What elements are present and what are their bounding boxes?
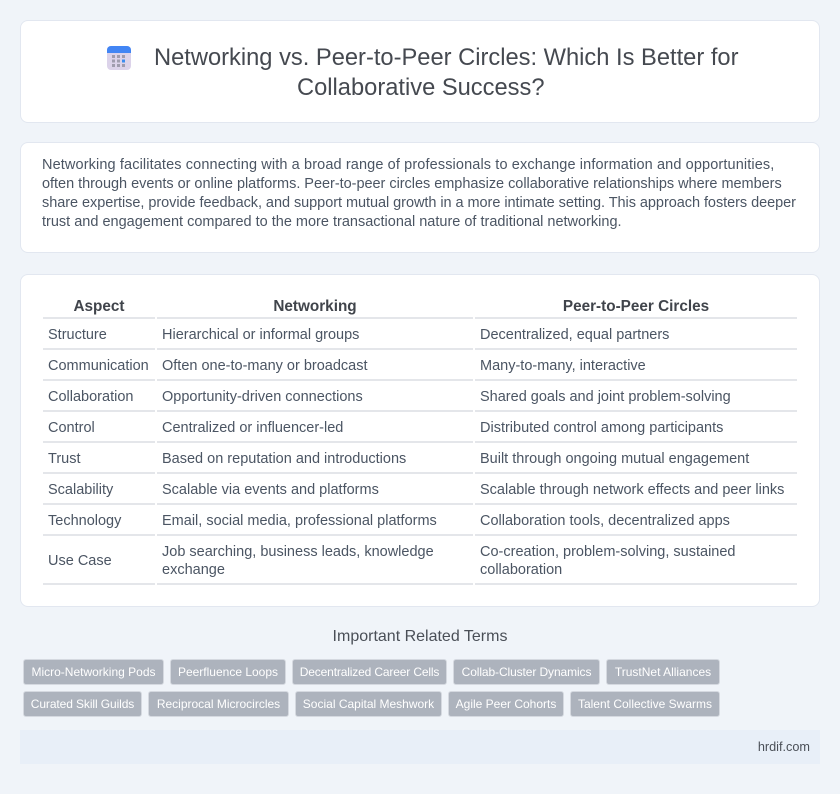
title: Collaborative Success? (297, 75, 545, 101)
footer (20, 730, 820, 764)
footer: source: hrdif.com (758, 740, 810, 754)
panel: comparison table: Hierarchical or informal groups (162, 327, 359, 343)
related terms tags: Curated Skill Guilds (31, 697, 134, 711)
panel: comparison table: Job searching, business leads, knowledge (162, 544, 434, 560)
panel: comparison table: Opportunity-driven connections (162, 389, 363, 405)
panel: comparison table: collaboration (480, 562, 562, 578)
related terms tags: Social Capital Meshwork (303, 697, 434, 711)
panel: comparison table: exchange (162, 562, 225, 578)
title: Networking vs. Peer-to-Peer Circles: Which Is Better for (154, 45, 738, 71)
panel: comparison table: Many-to-many, interactive (480, 358, 646, 374)
table header: Peer-to-Peer Circles: Peer-to-Peer Circles (563, 298, 709, 315)
related terms tags: Decentralized Career Cells (300, 665, 439, 679)
panel: comparison table: Built through ongoing mutual engagement (480, 451, 749, 467)
text block: description: Networking facilitates connecting with a broad range of professionals to exchange information and opportunities, (42, 157, 774, 173)
panel: comparison table: Shared goals and joint problem-solving (480, 389, 731, 405)
text block: description: often through events or online platforms. Peer-to-peer circles emphasize collaborative relationships where members (42, 176, 782, 192)
row: Technology: Technology (48, 513, 121, 529)
panel: comparison table: Scalable through network effects and peer links (480, 482, 784, 498)
related terms tags (23, 659, 720, 717)
panel: description (20, 142, 820, 253)
row: Collaboration: Collaboration (48, 389, 133, 405)
text block: description (42, 157, 796, 230)
row: Trust: Trust (48, 451, 80, 467)
table header: Aspect: Aspect (73, 298, 124, 315)
panel: comparison table: Scalable via events and platforms (162, 482, 379, 498)
row: Use Case: Use Case (48, 553, 112, 569)
icon: calendar (107, 46, 131, 70)
row: Scalability: Scalability (48, 482, 113, 498)
panel: comparison table: Based on reputation and introductions (162, 451, 406, 467)
panel: comparison table: Often one-to-many or broadcast (162, 358, 368, 374)
text block: description: share expertise, provide feedback, and support mutual growth in a more intimate setting. This approach fosters deeper (42, 195, 796, 211)
text block: description: trust and engagement compared to the more transactional nature of traditional networking. (42, 214, 622, 230)
panel: comparison table: Email, social media, professional platforms (162, 513, 437, 529)
related terms tags: Micro-Networking Pods (31, 665, 156, 679)
table header: Networking: Networking (273, 298, 357, 315)
panel: comparison table: Collaboration tools, decentralized apps (480, 513, 730, 529)
related terms tags: TrustNet Alliances (615, 665, 711, 679)
panel: header (20, 20, 820, 123)
panel: comparison table: Distributed control among participants (480, 420, 723, 436)
related terms tags: Talent Collective Swarms (578, 697, 712, 711)
heading: Important Related Terms: Important Related Terms (333, 628, 507, 645)
row: Structure: Structure (48, 327, 107, 343)
related terms tags: Collab-Cluster Dynamics (462, 665, 591, 679)
panel: comparison table: Decentralized, equal partners (480, 327, 669, 343)
related terms tags: Peerfluence Loops (178, 665, 278, 679)
title (154, 45, 738, 101)
panel: comparison table (20, 274, 820, 607)
related terms tags: Agile Peer Cohorts (456, 697, 556, 711)
related terms tags: Reciprocal Microcircles (157, 697, 280, 711)
panel: comparison table: Co-creation, problem-solving, sustained (480, 544, 736, 560)
row: Communication: Communication (48, 358, 149, 374)
row: Control: Control (48, 420, 95, 436)
panel: comparison table: Centralized or influencer-led (162, 420, 343, 436)
